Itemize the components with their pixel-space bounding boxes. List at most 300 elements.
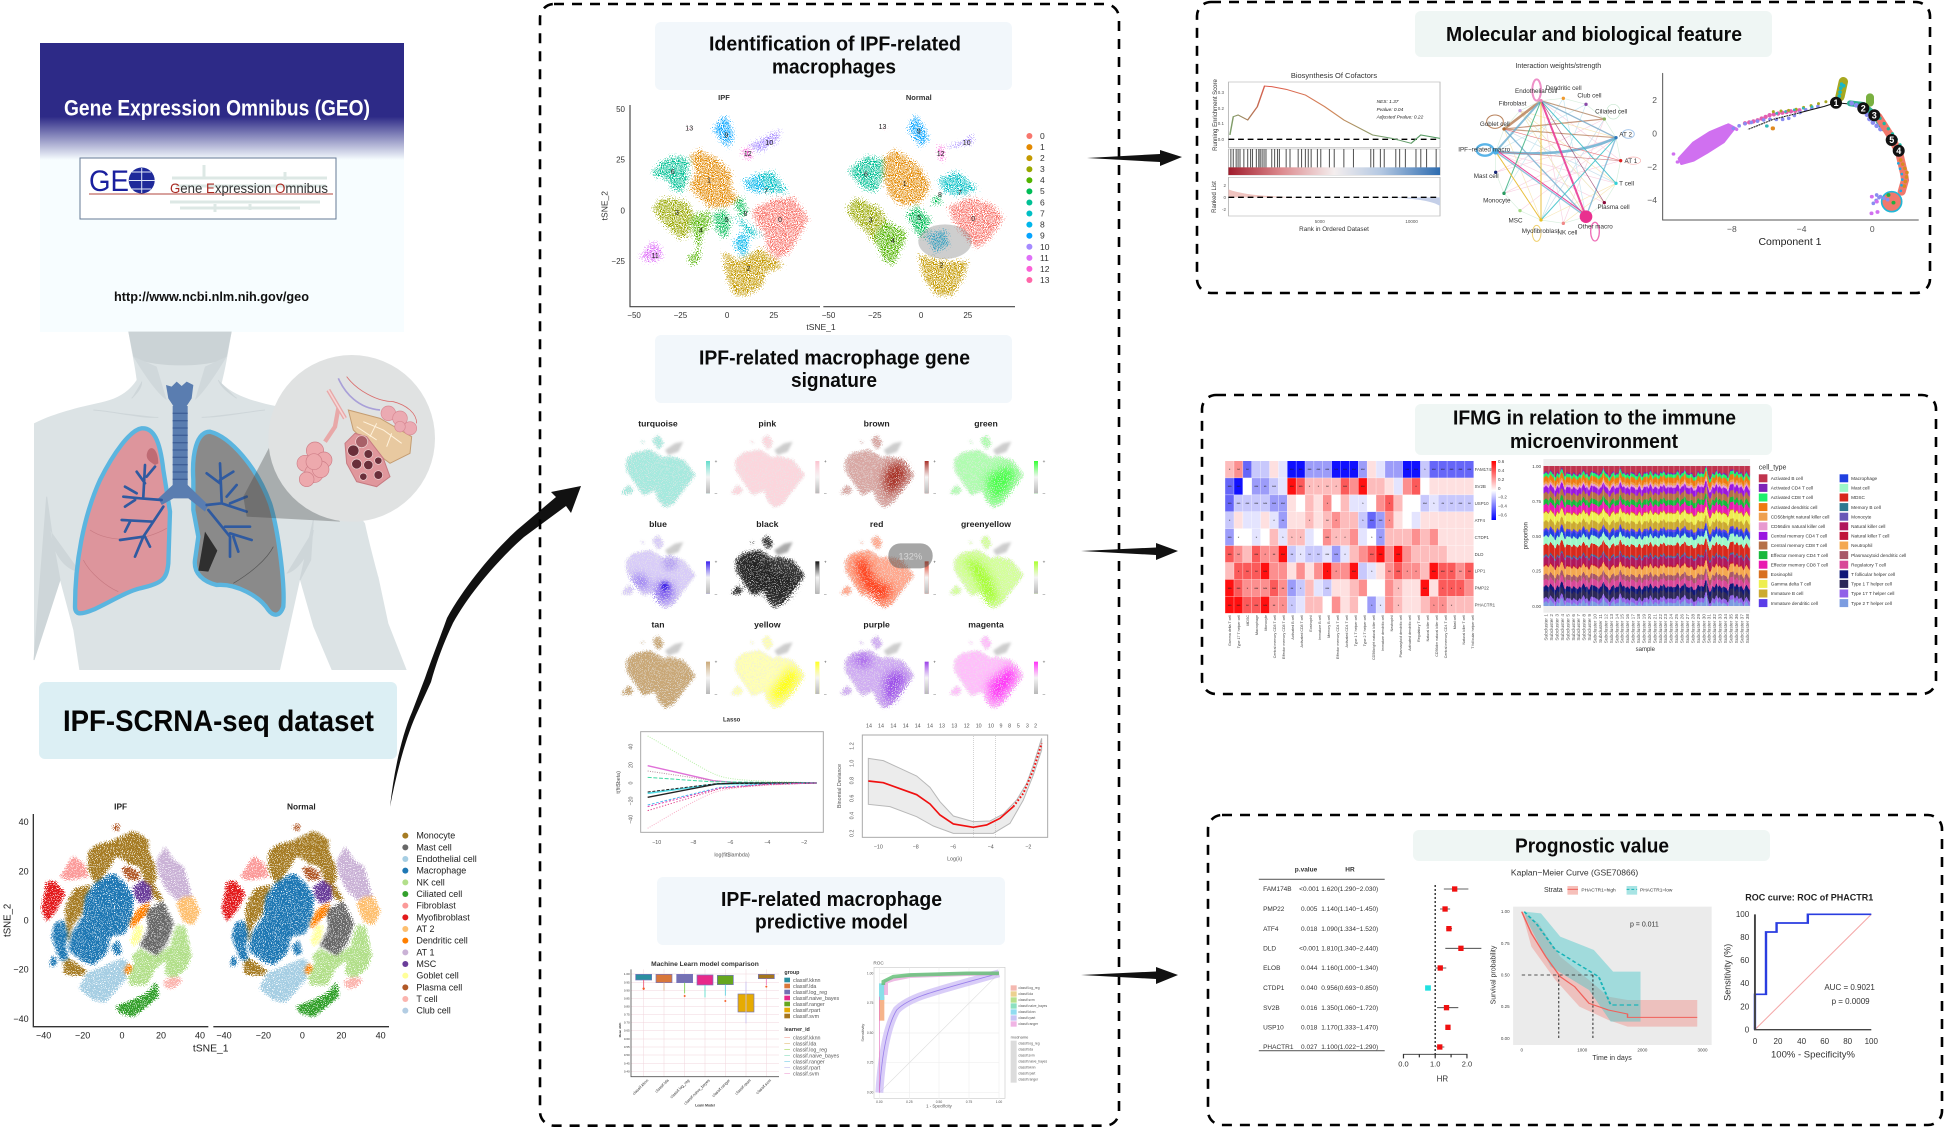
heatmap significance stars: * — [1371, 535, 1373, 540]
chart: ROC model comparison: 0.50 — [936, 1100, 942, 1104]
ROC legend: classif.ranger — [1018, 1022, 1039, 1026]
chart: cell interaction network: Fibroblast — [1499, 101, 1527, 108]
heatmap significance stars: *** — [1458, 501, 1463, 506]
axis labels: 0.80 — [624, 1005, 630, 1009]
trajectory state markers: 5 — [1889, 135, 1894, 145]
axis labels: 0.70 — [624, 1021, 630, 1025]
legend: cell_type: Gamma delta T cell — [1771, 582, 1811, 587]
heatmap significance stars: * — [1335, 535, 1337, 540]
heatmap significance stars: *** — [1263, 603, 1268, 608]
heatmap significance stars: *** — [1228, 603, 1232, 608]
heatmap significance stars: ** — [1308, 552, 1311, 557]
heatmap colour scale: −0.4 — [1498, 504, 1507, 509]
heatmap significance stars: ** — [1237, 467, 1240, 472]
tick labels: −40 — [36, 1031, 51, 1041]
model legend: classif.svm — [793, 1071, 820, 1077]
chart: forest plot table: CTDP1 — [1263, 985, 1285, 992]
heatmap gene labels: ATF4 — [1475, 518, 1486, 523]
heatmap significance stars: *** — [1458, 467, 1463, 472]
heatmap significance stars: ** — [1282, 586, 1285, 591]
heatmap significance stars: * — [1415, 484, 1417, 489]
stacked bar sample labels: Subcluster 33 — [1718, 614, 1724, 643]
legend: cell types: Macrophage — [416, 866, 466, 876]
stacked bar sample labels: Subcluster 23 — [1663, 614, 1669, 643]
left lung — [75, 428, 170, 613]
chart: ROC model comparison: 0.75 — [966, 1100, 972, 1104]
stacked bar sample labels: Subcluster 7 — [1576, 614, 1582, 641]
chart: cell interaction network: NK cell — [1557, 230, 1577, 237]
chart: forest plot table: ATF4 — [1263, 926, 1279, 933]
chart: ROC curve of PHACTR1: 0 — [1745, 1026, 1750, 1034]
heading: predictive model — [657, 877, 1005, 945]
chart: ROC curve of PHACTR1: p = 0.0009 — [1832, 997, 1870, 1006]
tick labels: 0 — [119, 1031, 124, 1041]
heatmap significance stars: *** — [1405, 467, 1410, 472]
heatmap cell-type labels: Monocyte — [1264, 615, 1268, 631]
chart: GSEA enrichment plot: 5000 — [1315, 219, 1325, 224]
chart: pseudotime trajectory: 0 — [1870, 224, 1875, 234]
stacked bar sample labels: Subcluster 1 — [1544, 614, 1550, 641]
Normal clusters — [222, 824, 380, 1017]
cluster numbers: 0 — [971, 216, 975, 223]
cluster numbers: 7 — [958, 190, 962, 197]
heatmap significance stars: *** — [1263, 569, 1268, 574]
heatmap cell-type labels: Activated dendritic cell — [1408, 615, 1412, 651]
trajectory state markers — [1830, 97, 1905, 157]
ROC legend: classif.lda — [1018, 1047, 1033, 1051]
model legend: classif.log_reg — [793, 1047, 827, 1053]
model legend: classif.lda — [793, 1041, 816, 1047]
chart: Kaplan-Meier survival curve: 2000 — [1637, 1048, 1648, 1052]
axis labels: 0.95 — [624, 980, 630, 984]
ROC legend: classif.lda — [1018, 992, 1033, 996]
tick labels — [2, 802, 386, 1055]
chart: forest plot table: 0.956(0.693−0.850) — [1321, 985, 1378, 992]
chart: Kaplan-Meier survival curve: Strata — [1544, 887, 1563, 894]
heatmap significance stars: * — [1335, 484, 1337, 489]
module names: black — [756, 519, 779, 529]
module names — [638, 419, 1011, 629]
GEO logo box — [80, 158, 336, 219]
heatmap cell-type labels: MDSC — [1246, 615, 1250, 626]
chart: cell interaction network: T cell — [1619, 180, 1634, 187]
legend: subclusters: 3 — [1040, 164, 1045, 174]
chart: Kaplan-Meier survival curve: 3000 — [1697, 1048, 1708, 1052]
chart: GSEA enrichment plot: 0.1 — [1218, 121, 1224, 126]
heatmap significance stars: * — [1442, 586, 1444, 591]
heatmap significance stars: ** — [1246, 603, 1249, 608]
stacked bar sample labels: Subcluster 25 — [1674, 614, 1680, 643]
chart: ROC curve of PHACTR1: AUC = 0.9021 — [1824, 983, 1875, 992]
cluster numbers: 9 — [724, 132, 728, 140]
tick labels and titles: 25 — [616, 156, 626, 165]
chart: ROC model comparison: 1.00 — [867, 971, 873, 975]
chart: cell interaction network: IPF−related macro — [1458, 146, 1511, 153]
legend: cell_type: Macrophage — [1851, 476, 1878, 481]
heading: molecular — [1415, 11, 1772, 57]
tick labels and titles: 0 — [919, 311, 924, 320]
heatmap significance stars: *** — [1379, 518, 1383, 523]
heatmap significance stars: *** — [1432, 467, 1436, 472]
heatmap significance stars: *** — [1441, 569, 1445, 574]
cluster numbers: 3 — [675, 210, 679, 217]
legend: cell_type: Memory B cell — [1851, 505, 1881, 510]
legend: cell_type: Activated B cell — [1771, 476, 1803, 481]
heatmap significance stars: *** — [1361, 467, 1365, 472]
ROC legend: classif.svm — [1018, 1053, 1035, 1057]
heatmap significance stars: *** — [1237, 586, 1241, 591]
chart: lasso coefficient paths: −8 — [690, 840, 696, 846]
trajectory state markers: 4 — [1896, 146, 1901, 156]
heatmap significance stars: ** — [1246, 569, 1249, 574]
axis labels: classif.rpart — [734, 1077, 752, 1096]
model legend: classif.rpart — [793, 1008, 821, 1014]
axis labels: 0.50 — [624, 1053, 630, 1057]
model legend: learner_id — [784, 1027, 810, 1033]
chart: cell interaction network: Endothelial cell — [1515, 88, 1557, 95]
model legend: classif.lda — [793, 984, 816, 990]
chart: lasso cross-validation deviance: −10 — [874, 845, 883, 851]
tick labels and titles: 25 — [769, 311, 779, 320]
chart: machine learning model comparison boxplot — [618, 961, 840, 1108]
chart: lasso coefficient paths: −40 — [629, 815, 635, 824]
chart: forest plot table: 2.0 — [1462, 1060, 1472, 1068]
ROC legend: classif.kknn — [1018, 1010, 1036, 1014]
tick labels and titles: −50 — [627, 311, 641, 320]
heatmap significance stars: *** — [1343, 484, 1348, 489]
ROC legend: classif.log_reg — [1018, 986, 1040, 990]
legend: subclusters: 11 — [1040, 253, 1049, 263]
axis labels: 0.75 — [624, 1013, 630, 1017]
heatmap significance stars: ** — [1273, 552, 1276, 557]
stacked bar sample labels: Subcluster 38 — [1745, 614, 1751, 643]
module names: yellow — [754, 619, 781, 629]
chart: GSEA enrichment plot: 0.3 — [1218, 90, 1224, 95]
stacked bar axis labels — [1532, 464, 1541, 609]
chart: Kaplan-Meier survival curve: 0.50 — [1501, 972, 1510, 978]
heatmap significance stars: * — [1282, 603, 1284, 608]
heatmap significance stars: * — [1291, 603, 1293, 608]
stacked bar sample labels: Subcluster 35 — [1728, 614, 1734, 643]
heatmap significance stars: * — [1238, 535, 1240, 540]
stacked bar sample labels: Subcluster 18 — [1636, 614, 1642, 643]
chart: lasso cross-validation deviance: −6 — [950, 845, 956, 851]
heatmap significance stars: * — [1335, 518, 1337, 523]
chart: Kaplan-Meier survival curve: p = 0.011 — [1630, 922, 1659, 928]
heatmap significance stars: *** — [1290, 467, 1294, 472]
heatmap significance stars: ** — [1290, 552, 1294, 557]
legend: subclusters: 5 — [1040, 186, 1045, 196]
heatmap significance stars: * — [1256, 535, 1258, 540]
chart: forest plot table: FAM174B — [1263, 886, 1292, 893]
chart: forest plot table: 1.140(1.140−1.450) — [1321, 906, 1378, 913]
legend: cell types: Goblet cell — [416, 971, 459, 981]
heatmap gene labels: PHACTR1 — [1475, 602, 1496, 608]
legend: cell_type: Type 2 T helper cell — [1851, 601, 1892, 606]
heatmap significance stars: *** — [1450, 467, 1454, 472]
legend: subclusters: 0 — [1040, 131, 1045, 141]
chart: pseudotime trajectory: −8 — [1727, 224, 1737, 234]
chart: forest plot table: 1.810(1.340−2.440) — [1321, 946, 1378, 952]
chart: cell interaction network: Plasma cell — [1597, 204, 1630, 211]
grey base shapes — [622, 435, 1023, 708]
legend: subclusters: 8 — [1040, 220, 1045, 230]
chart: lasso coefficient paths: 0 — [629, 781, 635, 784]
chart: cell interaction network: Other macro — [1578, 224, 1613, 231]
heatmap significance stars: *** — [1237, 603, 1241, 608]
cluster numbers: 6 — [864, 172, 868, 178]
cluster numbers: 8 — [938, 192, 942, 199]
heatmap significance stars: * — [1282, 535, 1284, 540]
tick labels and titles: −25 — [674, 311, 688, 320]
stacked bar sample labels: Subcluster 2 — [1549, 614, 1555, 641]
heatmap significance stars: *** — [1334, 552, 1339, 557]
axis labels: classif.kknn — [631, 1078, 649, 1096]
cluster numbers: 8 — [744, 211, 748, 218]
heatmap significance stars: * — [1335, 569, 1337, 574]
stacked bar sample labels: Subcluster 22 — [1658, 614, 1664, 643]
tick labels: −40 — [216, 1031, 232, 1041]
heatmap significance stars: ** — [1246, 467, 1249, 472]
heatmap significance stars: * — [1273, 518, 1275, 523]
chart: pseudotime trajectory — [1647, 73, 1918, 248]
GEO url: http://www.ncbi.nlm.nih.gov/geo — [114, 290, 309, 304]
heatmap cell-type labels: Central memory CD8 T cell — [1273, 615, 1277, 658]
heatmap significance stars: *** — [1228, 586, 1232, 591]
chart: forest plot table: DLD — [1263, 946, 1276, 952]
heatmap significance stars: *** — [1228, 484, 1232, 489]
module names: magenta — [968, 619, 1004, 629]
stacked bar sample labels: Subcluster 36 — [1734, 614, 1740, 643]
module names: purple — [863, 619, 890, 629]
heatmap significance stars: ** — [1468, 569, 1471, 574]
chart: forest plot table: 0.016 — [1301, 1005, 1318, 1012]
chart: lasso cross-validation deviance: 0.4 — [849, 812, 855, 819]
arrow: to prognostic value — [1081, 967, 1178, 984]
heatmap significance stars: * — [1424, 467, 1426, 472]
heatmap cell-type labels: Effector memory CD4 T cell — [1336, 615, 1340, 659]
tick labels: 40 — [195, 1031, 205, 1041]
cluster numbers: 4 — [891, 238, 895, 245]
heatmap significance stars: * — [1451, 586, 1453, 591]
arrow: to molecular features — [1087, 150, 1182, 166]
chart: forest plot table: PHACTR1 — [1263, 1044, 1294, 1051]
chart: forest plot table: 1.350(1.060−1.720) — [1321, 1005, 1378, 1012]
chart: lasso cross-validation deviance: 9 — [1000, 723, 1003, 729]
cluster numbers: 3 — [869, 218, 873, 224]
heatmap significance stars: *** — [1432, 569, 1436, 574]
cluster numbers: 9 — [917, 128, 921, 136]
heatmap significance stars: *** — [1281, 552, 1285, 557]
arrow: dataset to analysis panel — [390, 486, 581, 807]
heatmap significance stars: ** — [1255, 569, 1258, 574]
stacked bar sample labels: Subcluster 14 — [1614, 614, 1620, 643]
heatmap significance stars: * — [1389, 518, 1391, 523]
model legend: classif.svm — [793, 1014, 820, 1020]
chart: pseudotime trajectory: 2 — [1652, 95, 1657, 105]
heatmap significance stars: ** — [1379, 535, 1382, 540]
chart: gene-immune correlation heatmap — [1225, 459, 1507, 660]
heatmap significance stars: * — [1247, 586, 1249, 591]
legend: cell_type: Eosinophil — [1771, 572, 1792, 577]
heatmap significance stars: * — [1371, 569, 1373, 574]
heatmap significance stars: *** — [1281, 501, 1285, 506]
chart: lasso cross-validation deviance: 10 — [988, 723, 994, 729]
trajectory state markers: 2 — [1861, 104, 1866, 114]
tick labels: −20 — [256, 1031, 271, 1041]
chart: cell interaction network: Myofibroblast — [1522, 228, 1559, 235]
legend: subclusters: 13 — [1040, 275, 1050, 285]
chart: lasso cross-validation deviance: 14 — [890, 723, 896, 729]
axis labels — [624, 972, 773, 1106]
stacked bar sample labels: Subcluster 19 — [1642, 614, 1648, 643]
tick labels and titles: Normal — [906, 93, 932, 102]
heatmap significance stars: *** — [1343, 467, 1348, 472]
heatmap cell-type labels: Eosinophil — [1309, 615, 1313, 632]
chart: lasso cross-validation deviance: 0.6 — [849, 795, 855, 802]
heatmap significance stars: ** — [1441, 501, 1445, 506]
chart: GSEA enrichment plot: NES: 1.37 — [1377, 99, 1399, 105]
chart: Kaplan-Meier survival curve: 1000 — [1577, 1048, 1588, 1052]
heatmap significance stars: *** — [1237, 501, 1241, 506]
heatmap significance stars: * — [1433, 501, 1435, 506]
chart: lasso coefficient paths: −2 — [801, 840, 807, 846]
chart: lasso coefficient paths — [616, 717, 823, 859]
heatmap significance stars: ** — [1273, 603, 1276, 608]
heatmap significance stars: ** — [1459, 569, 1462, 574]
chart: lasso cross-validation deviance: 13 — [951, 723, 957, 729]
heatmap gene labels — [1475, 467, 1496, 608]
tick labels: 40 — [376, 1031, 386, 1041]
legend: cell types: AT 1 — [416, 947, 434, 957]
chart: GSEA enrichment plot: Ranked List — [1212, 181, 1218, 213]
chart: ROC curve of PHACTR1: 80 — [1843, 1037, 1853, 1046]
stacked bar sample labels: Subcluster 28 — [1690, 614, 1696, 643]
heatmap significance stars: *** — [1325, 467, 1330, 472]
ROC legend: classif.kknn — [1018, 1065, 1036, 1069]
chart: lasso cross-validation deviance: 13 — [939, 723, 945, 729]
tick labels and titles: IPF — [718, 93, 730, 102]
ROC legend: classif.naive_bayes — [1018, 1004, 1048, 1008]
module names: greenyellow — [961, 519, 1011, 529]
chart: lasso cross-validation deviance: 12 — [964, 723, 970, 729]
heatmap significance stars: * — [1389, 501, 1391, 506]
ROC legend: classif.rpart — [1018, 1071, 1035, 1075]
stacked bar sample labels: Subcluster 10 — [1592, 614, 1598, 643]
chart: lasso cross-validation deviance: 8 — [1008, 723, 1011, 729]
model legend: classif.kknn — [793, 978, 821, 984]
heatmap significance stars: * — [1327, 501, 1329, 506]
tick labels: IPF — [114, 802, 127, 812]
heatmap significance stars: *** — [1325, 586, 1330, 591]
heatmap significance stars: *** — [1299, 467, 1303, 472]
chart: forest plot table: <0.001 — [1299, 886, 1320, 893]
chart: forest plot table: 0.0 — [1398, 1060, 1409, 1068]
heatmap significance stars: * — [1398, 586, 1400, 591]
chart: forest plot table: 1.160(1.000−1.340) — [1321, 965, 1378, 972]
heatmap significance stars: * — [1344, 535, 1346, 540]
heatmap significance stars: *** — [1467, 467, 1472, 472]
model legend: classif.log_reg — [793, 990, 827, 996]
heatmap significance stars: *** — [1237, 484, 1241, 489]
chart: ROC model comparison: 0.75 — [867, 1001, 873, 1005]
right lung — [193, 432, 284, 615]
legend: cell types: Dendritic cell — [416, 936, 468, 946]
GEO logo box: Gene Expression Omnibus — [170, 180, 328, 196]
panel: prognostic value — [1208, 815, 1942, 1125]
heatmap significance stars: * — [1344, 552, 1346, 557]
chart: machine learning model comparison boxplot: Learn Model — [695, 1104, 715, 1108]
stacked bar sample labels: Subcluster 16 — [1625, 614, 1631, 643]
heatmap significance stars: *** — [1228, 552, 1232, 557]
legend: cell_type: Neutrophil — [1851, 543, 1872, 548]
chart: Kaplan-Meier survival curve — [1490, 868, 1712, 1062]
stacked bar sample labels: Subcluster 13 — [1609, 614, 1615, 643]
heatmap significance stars: ** — [1282, 518, 1285, 523]
heading: immune: IFMG in relation to the immune — [1453, 408, 1736, 430]
heatmap gene labels: FAM174B — [1475, 467, 1494, 472]
chart: forest plot table: 0.027 — [1301, 1044, 1318, 1051]
chart: immune cell proportion stacked bars: sample — [1636, 647, 1656, 653]
legend: cell_type — [1759, 464, 1906, 607]
heading: predictive model: predictive model — [755, 912, 908, 934]
model curves — [879, 973, 999, 1093]
chart: GSEA enrichment plot: Rank in Ordered Dataset — [1299, 226, 1369, 233]
chart: ROC model comparison: 0.25 — [906, 1100, 913, 1104]
stacked bar sample labels: Subcluster 24 — [1669, 614, 1675, 643]
cluster numbers: 5 — [725, 217, 729, 224]
ROC legend: classif.svm — [1018, 998, 1035, 1002]
heatmap significance stars: * — [1442, 603, 1444, 608]
trachea and bronchi — [120, 382, 252, 557]
heading: molecular: Molecular and biological feature — [1446, 24, 1742, 46]
legend: cell_type: Effector memory CD4 T cell — [1771, 553, 1828, 558]
legend: cell_type: Plasmacytoid dendritic cell — [1851, 553, 1906, 558]
chart: ROC curve of PHACTR1: Sensitivity (%) — [1722, 944, 1732, 1001]
stacked bar sample labels — [1544, 614, 1751, 643]
chart: lasso cross-validation deviance: Binomial Deviance — [837, 764, 843, 808]
heatmap significance stars: *** — [1272, 586, 1277, 591]
stacked bar sample labels: Subcluster 3 — [1554, 614, 1560, 641]
heatmap significance stars: *** — [1272, 484, 1277, 489]
panel: GEO database — [40, 43, 404, 332]
chart: machine learning model comparison boxplot: Machine Learn model comparison — [651, 961, 759, 968]
heatmap cell-type labels: Type 1 T helper cell — [1354, 615, 1358, 646]
legend: cell_type: MDSC — [1851, 495, 1866, 500]
chart: GSEA enrichment plot: Pvalue: 0.04 — [1377, 107, 1404, 113]
alveoli inset circle — [268, 355, 435, 522]
model legend: classif.rpart — [793, 1065, 821, 1071]
heatmap cell-type labels: Type 17 T helper cell — [1237, 615, 1241, 648]
tick labels: 40 — [19, 817, 29, 827]
stacked bar sample labels: Subcluster 17 — [1631, 614, 1637, 643]
chart: lasso cross-validation deviance: 0.2 — [849, 830, 855, 837]
heatmap significance stars: *** — [1423, 501, 1427, 506]
axis labels: 0.60 — [624, 1037, 630, 1041]
chart: Kaplan-Meier survival curve: 0.00 — [1501, 1036, 1510, 1041]
axis labels: 0.90 — [624, 988, 630, 992]
chart: GSEA enrichment plot: 2 — [1223, 183, 1226, 188]
axis labels: classif.ranger — [711, 1077, 732, 1098]
legend: cell_type: Mast cell — [1851, 486, 1870, 491]
heatmap significance stars: *** — [1361, 484, 1365, 489]
heatmap significance stars: *** — [1228, 501, 1232, 506]
stacked bar sample labels: Subcluster 31 — [1707, 614, 1713, 643]
chart: lasso cross-validation deviance: 14 — [903, 723, 909, 729]
heatmap significance stars: *** — [1334, 467, 1339, 472]
chart: forest plot table: 1.100(1.022−1.290) — [1321, 1044, 1378, 1051]
legend: subclusters: 12 — [1040, 264, 1050, 274]
